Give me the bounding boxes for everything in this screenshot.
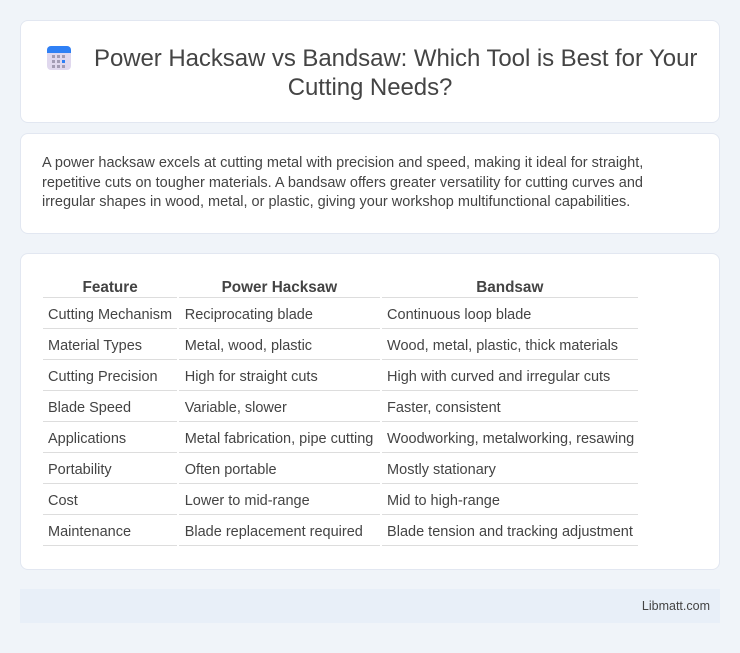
panel: intro bbox=[20, 133, 720, 234]
comparison table: High with curved and irregular cuts bbox=[387, 369, 610, 385]
comparison table: Mid to high-range bbox=[387, 493, 500, 509]
comparison table: Blade tension and tracking adjustment bbox=[387, 524, 633, 540]
icon: calendar bbox=[47, 46, 71, 70]
panel: comparison table card bbox=[20, 253, 720, 570]
comparison table: Cost bbox=[48, 493, 78, 509]
comparison table: Cutting Mechanism bbox=[48, 307, 172, 323]
intro text: A power hacksaw excels at cutting metal with precision and speed, making it ideal for straight, bbox=[42, 155, 643, 171]
comparison table: Reciprocating blade bbox=[185, 307, 313, 323]
intro text: irregular shapes in wood, metal, or plastic, giving your workshop multifunctional capabilities. bbox=[42, 194, 630, 210]
comparison table: Bandsaw bbox=[476, 279, 543, 296]
footer bar bbox=[20, 589, 720, 623]
intro text: repetitive cuts on tougher materials. A bandsaw offers greater versatility for cutting curves and bbox=[42, 175, 643, 191]
intro text bbox=[42, 155, 643, 210]
comparison table: Woodworking, metalworking, resawing bbox=[387, 431, 634, 447]
comparison table: Feature bbox=[82, 279, 138, 296]
comparison table: Mostly stationary bbox=[387, 462, 496, 478]
comparison table: Material Types bbox=[48, 338, 142, 354]
comparison table: Blade replacement required bbox=[185, 524, 363, 540]
comparison table: Continuous loop blade bbox=[387, 307, 531, 323]
comparison table: Metal fabrication, pipe cutting bbox=[185, 431, 373, 447]
comparison table: Cutting Precision bbox=[48, 369, 158, 385]
comparison table: Often portable bbox=[185, 462, 277, 478]
comparison table: Wood, metal, plastic, thick materials bbox=[387, 338, 618, 354]
comparison table: Faster, consistent bbox=[387, 400, 501, 416]
comparison table: Applications bbox=[48, 431, 126, 447]
comparison table: Power Hacksaw bbox=[222, 279, 337, 296]
footer credit: Libmatt.com bbox=[642, 599, 710, 613]
comparison table: Variable, slower bbox=[185, 400, 287, 416]
comparison table bbox=[43, 279, 638, 546]
panel: header bbox=[20, 20, 720, 123]
comparison table: Lower to mid-range bbox=[185, 493, 310, 509]
title: Cutting Needs? bbox=[288, 74, 452, 101]
comparison table: Blade Speed bbox=[48, 400, 131, 416]
comparison table: Maintenance bbox=[48, 524, 131, 540]
comparison table: Metal, wood, plastic bbox=[185, 338, 312, 354]
title bbox=[94, 45, 697, 101]
comparison table: Portability bbox=[48, 462, 112, 478]
title: Power Hacksaw vs Bandsaw: Which Tool is Best for Your bbox=[94, 45, 697, 72]
comparison table: High for straight cuts bbox=[185, 369, 318, 385]
